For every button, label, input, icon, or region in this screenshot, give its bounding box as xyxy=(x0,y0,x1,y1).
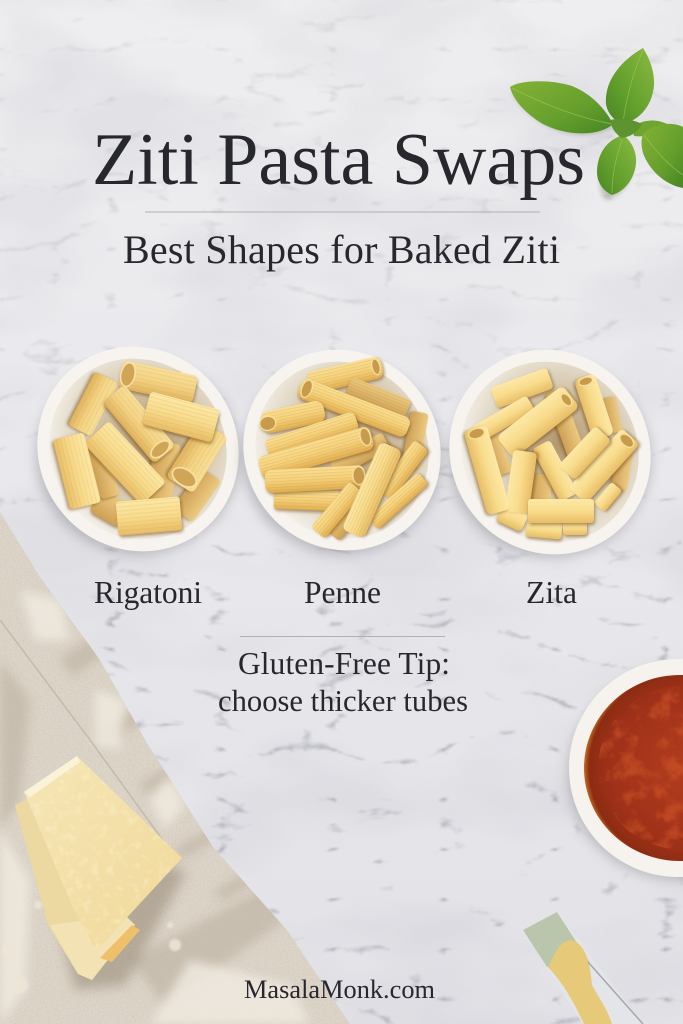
basil leaf: bottom xyxy=(597,135,636,195)
gluten-free tip: Gluten-Free Tip: xyxy=(238,646,450,681)
bowl: penne xyxy=(204,311,480,589)
bowl: rigatoni xyxy=(0,307,279,591)
basil leaf: top xyxy=(606,48,654,124)
pasta: background penne xyxy=(325,411,429,541)
label: rigatoni: Rigatoni xyxy=(94,575,202,610)
pasta: background zita xyxy=(484,388,633,540)
gluten-free tip xyxy=(218,646,468,718)
pasta: rigatoni tubes xyxy=(53,360,228,536)
grated cheese crumbs xyxy=(2,865,181,993)
basil sprig xyxy=(510,48,683,200)
basil leaf: right xyxy=(642,124,683,188)
parmesan wedge xyxy=(15,756,186,990)
gluten-free tip: choose thicker tubes xyxy=(218,684,468,718)
pasta: zita tubes xyxy=(463,367,640,523)
pasta: penne tubes xyxy=(257,356,429,539)
website credit: MasalaMonk.com xyxy=(244,975,436,1004)
sauce bowl xyxy=(568,659,683,880)
label: zita: Zita xyxy=(526,575,577,610)
pasta: background rigatoni xyxy=(86,370,221,528)
subtitle: Best Shapes for Baked Ziti xyxy=(123,227,560,272)
label: penne: Penne xyxy=(304,575,381,610)
bowl: zita xyxy=(409,310,683,594)
basil stem xyxy=(610,119,642,138)
basil leaf: small xyxy=(632,121,667,136)
title divider xyxy=(145,212,540,213)
title: Ziti Pasta Swaps xyxy=(92,119,585,201)
tip divider xyxy=(240,636,445,637)
cheese knife xyxy=(523,912,643,1024)
cloth napkin xyxy=(0,500,360,1024)
basil leaf: left xyxy=(510,81,613,133)
